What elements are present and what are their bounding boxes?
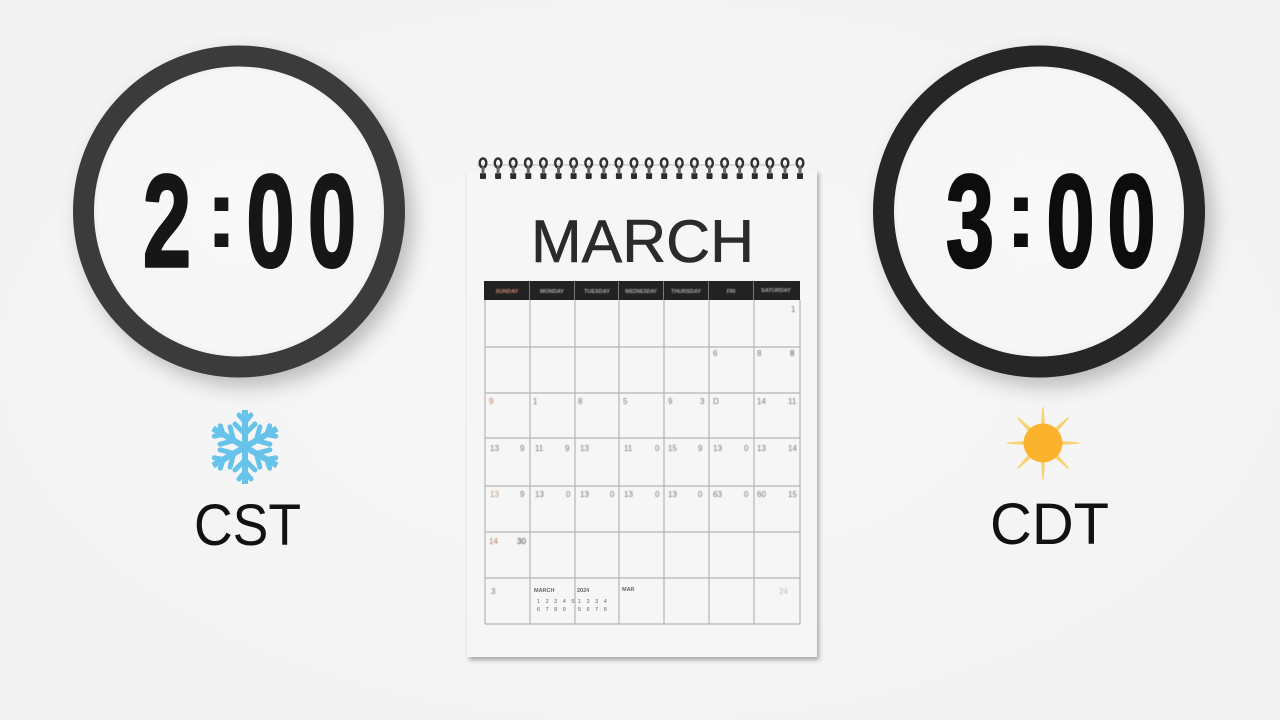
weekday header bar: SUNDAY: [496, 289, 519, 295]
calendar day numbers: 8: [790, 349, 795, 358]
calendar day numbers: 60: [757, 490, 766, 499]
weekday header bar: FRI: [727, 289, 736, 295]
calendar day numbers: D: [713, 397, 719, 406]
calendar footer notes: 1 2 3 4: [578, 599, 609, 605]
panel: right clock CDT 3:00: [884, 56, 1194, 367]
calendar day numbers: 8: [578, 397, 583, 406]
calendar day numbers: 13: [713, 444, 722, 453]
calendar day numbers: 13: [668, 490, 677, 499]
clock time: 3:00: 0: [1046, 147, 1095, 295]
weekday header bar: THURSDAY: [671, 289, 701, 295]
calendar month heading: MARCH: [531, 208, 754, 275]
label: CST: CST: [194, 493, 301, 558]
weekday header bar: WEDNESDAY: [625, 289, 658, 295]
clock time: 2:00: 0: [246, 147, 295, 295]
calendar day numbers: 13: [490, 490, 499, 499]
calendar day numbers: 11: [624, 444, 633, 453]
clock time: 2:00: 0: [308, 147, 356, 295]
panel: winter label: [194, 410, 301, 558]
calendar day numbers: 0: [744, 444, 749, 453]
calendar day numbers: 14: [757, 397, 766, 406]
calendar day numbers: 9: [520, 490, 525, 499]
calendar day numbers: 0: [655, 444, 660, 453]
calendar page: [467, 170, 817, 657]
calendar day numbers: 1: [791, 305, 796, 314]
panel: summer label: [990, 407, 1109, 557]
calendar day numbers: 5: [623, 397, 628, 406]
calendar day numbers: 3: [700, 397, 705, 406]
clock time: 2:00: :: [205, 158, 238, 268]
calendar day numbers: 13: [580, 444, 589, 453]
calendar day numbers: 30: [517, 537, 526, 546]
clock time: 3:00: 3: [946, 147, 994, 295]
calendar footer notes: MARCH: [534, 588, 554, 594]
calendar day numbers: 0: [610, 490, 615, 499]
clock time: 2:00: 2: [143, 147, 191, 295]
calendar day numbers: 8: [757, 349, 762, 358]
calendar day numbers: 9: [698, 444, 703, 453]
calendar day numbers: 11: [535, 444, 544, 453]
calendar day numbers: 9: [565, 444, 570, 453]
calendar day numbers: 1: [533, 397, 538, 406]
calendar day numbers: 9: [520, 444, 525, 453]
calendar day numbers: [489, 305, 797, 596]
calendar day numbers: 13: [490, 444, 499, 453]
clock ring: left: [84, 56, 394, 367]
calendar day numbers: 14: [788, 444, 797, 453]
weekday header bar: MONDAY: [540, 289, 564, 295]
calendar footer notes: [534, 587, 635, 613]
calendar day numbers: 15: [668, 444, 677, 453]
calendar day numbers: 24: [779, 587, 788, 596]
calendar day numbers: 13: [757, 444, 766, 453]
calendar footer notes: 6 7 8 9: [537, 607, 568, 613]
calendar footer notes: 2024: [577, 588, 590, 594]
calendar day numbers: 63: [713, 490, 722, 499]
calendar day numbers: 0: [698, 490, 703, 499]
calendar day numbers: 13: [535, 490, 544, 499]
calendar day numbers: 0: [566, 490, 571, 499]
calendar day numbers: 6: [713, 349, 718, 358]
clock time: 3:00: :: [1005, 158, 1037, 268]
weekday header bar: SATURDAY: [761, 288, 791, 294]
calendar day numbers: 14: [489, 537, 498, 546]
panel: calendar: [467, 158, 817, 657]
clock time: 2:00: [143, 147, 356, 295]
calendar day numbers: 15: [788, 490, 797, 499]
calendar day numbers: 13: [580, 490, 589, 499]
icon: snowflake: [208, 410, 282, 484]
spiral binding: [477, 158, 805, 179]
calendar day numbers: 13: [624, 490, 633, 499]
calendar footer notes: MAR: [622, 587, 635, 593]
calendar footer notes: 1 2 3 4 5: [537, 599, 576, 605]
calendar footer notes: 5 6 7 8: [578, 607, 609, 613]
clock time: 3:00: [946, 147, 1156, 295]
panel: left clock CST 2:00: [84, 56, 394, 367]
calendar day numbers: 9: [668, 397, 673, 406]
weekday header bar: [484, 281, 800, 300]
label: CDT: CDT: [990, 492, 1109, 557]
icon: sun: [1007, 407, 1079, 480]
calendar day numbers: 11: [788, 397, 797, 406]
clock ring: right: [884, 56, 1194, 367]
calendar grid: [485, 300, 800, 624]
calendar day numbers: 3: [491, 587, 496, 596]
calendar day numbers: 0: [744, 490, 749, 499]
calendar day numbers: 9: [489, 397, 494, 406]
calendar day numbers: 0: [655, 490, 660, 499]
clock time: 3:00: 0: [1107, 147, 1156, 295]
weekday header bar: TUESDAY: [584, 289, 610, 295]
